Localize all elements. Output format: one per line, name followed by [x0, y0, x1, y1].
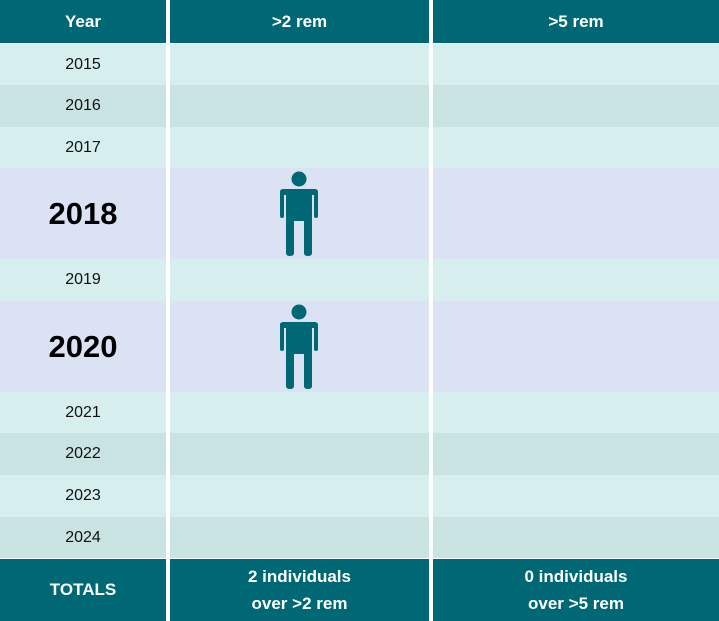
- text: 2023: [65, 487, 101, 504]
- text: 2021: [65, 404, 101, 420]
- total >2 rem: over >2 rem: [252, 594, 347, 613]
- icon: person 2020: [280, 304, 318, 389]
- header: >2 rem: >2 rem: [272, 12, 327, 30]
- total >5 rem: 0 individuals: [524, 567, 627, 586]
- totals label: [0, 559, 166, 621]
- text: 2015: [65, 56, 101, 72]
- header: >5 rem: >5 rem: [548, 12, 604, 30]
- total >5 rem: [433, 559, 719, 621]
- icon: person 2018: [280, 172, 318, 256]
- totals row: [0, 559, 719, 621]
- row 2020: [0, 301, 719, 392]
- total >5 rem: over >5 rem: [528, 594, 624, 613]
- header row: [0, 0, 719, 43]
- text: 2017: [65, 138, 101, 156]
- total >2 rem: [170, 559, 429, 621]
- row 2023: [0, 475, 719, 517]
- text: 2018: [49, 196, 117, 230]
- text: 2024: [65, 528, 101, 546]
- text: 2019: [65, 271, 101, 288]
- row 2016: [0, 85, 719, 127]
- header: Year: [0, 0, 166, 43]
- text: 2020: [49, 328, 117, 364]
- row 2017: [0, 127, 719, 168]
- row 2019: [0, 259, 719, 301]
- text: 2022: [65, 445, 101, 462]
- header: >5 rem: [433, 0, 719, 43]
- row 2015: [0, 44, 719, 85]
- totals label: TOTALS: [50, 580, 116, 599]
- text: 2016: [65, 97, 101, 114]
- row 2021: [0, 392, 719, 433]
- total >2 rem: 2 individuals: [248, 567, 351, 586]
- header: Year: Year: [65, 12, 101, 30]
- row 2018: [0, 168, 719, 259]
- row 2024: [0, 517, 719, 558]
- header: >2 rem: [170, 0, 429, 43]
- row 2022: [0, 433, 719, 475]
